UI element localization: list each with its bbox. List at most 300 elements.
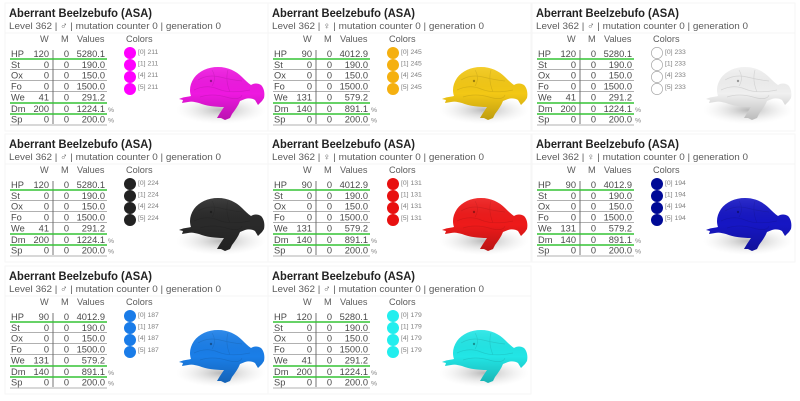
stat table: Fo	[11, 82, 22, 92]
colors legend: [0] 211	[138, 49, 159, 56]
stat table: Fo	[274, 82, 285, 92]
stat table: 0	[64, 246, 69, 256]
stat table: %	[108, 248, 114, 256]
stat table: 5280.1	[77, 180, 105, 190]
stat table: 291.2	[82, 92, 105, 102]
stat table: Ox	[11, 202, 23, 212]
stat table: 0	[591, 104, 596, 114]
stat table: HP	[11, 312, 24, 322]
stat table: Values	[604, 34, 632, 44]
stat table: Sp	[11, 114, 22, 124]
stat table: 200.0	[82, 114, 105, 124]
stat table: 891.1	[345, 104, 368, 114]
panel frame	[5, 266, 268, 394]
heading: Aberrant Beelzebufo (ASA)	[272, 269, 415, 283]
panel frame	[268, 266, 531, 394]
stat table: 140	[296, 235, 312, 245]
stat table: 120	[33, 180, 49, 190]
stat table: 131	[296, 92, 312, 102]
stat table: 4012.9	[340, 180, 368, 190]
stat table: 0	[327, 180, 332, 190]
stat table: 291.2	[345, 356, 368, 366]
stat table: Ox	[538, 202, 550, 212]
stat table: 0	[327, 367, 332, 377]
stat table: HP	[538, 180, 551, 190]
stat table: 0	[64, 60, 69, 70]
stat table	[532, 164, 795, 256]
stat table: Ox	[11, 334, 23, 344]
panel: black male	[5, 134, 268, 262]
stat table: 0	[591, 235, 596, 245]
colors legend: [1] 194	[665, 192, 686, 198]
stat table: 120	[296, 312, 312, 322]
stat table: 0	[64, 224, 69, 234]
stat table: 0	[571, 212, 576, 222]
stat table	[5, 296, 268, 388]
stat table: 200.0	[82, 246, 105, 256]
stat table: %	[635, 107, 641, 114]
stat table: Fo	[538, 212, 549, 222]
stat table: 150.0	[82, 334, 105, 344]
stat table: We	[538, 92, 552, 102]
stat table: 200	[33, 235, 49, 245]
stat table: 150.0	[345, 202, 368, 212]
stat table: W	[303, 297, 312, 307]
stat table: %	[108, 370, 114, 377]
stat table: HP	[11, 49, 24, 59]
stat table: Ox	[538, 70, 550, 80]
panel: blue male	[5, 266, 268, 394]
stat table: 140	[560, 235, 576, 245]
stat table: %	[371, 380, 377, 388]
stat table: 0	[64, 367, 69, 377]
stat table: Dm	[274, 235, 289, 245]
stat table: 0	[591, 224, 596, 234]
colors legend: [4] 211	[138, 72, 159, 79]
stat table: 0	[44, 114, 49, 124]
frog illustration	[176, 198, 266, 255]
frog illustration	[439, 330, 529, 387]
stat table	[5, 33, 268, 125]
stat table: 4012.9	[340, 49, 368, 59]
heading: Aberrant Beelzebufo (ASA)	[9, 269, 152, 283]
stat table: 0	[571, 82, 576, 92]
stat table: Fo	[11, 212, 22, 222]
stat table: 0	[307, 378, 312, 388]
stat table: 150.0	[609, 202, 632, 212]
stat table: W	[567, 165, 576, 175]
stat table: Sp	[538, 246, 549, 256]
stat table: %	[371, 248, 377, 256]
stat table: %	[371, 118, 377, 124]
stat table: 0	[44, 202, 49, 212]
stat table: Values	[340, 297, 368, 307]
stat table: 0	[64, 104, 69, 114]
heading: Aberrant Beelzebufo (ASA)	[536, 6, 679, 20]
stat table: St	[274, 191, 283, 201]
subtitle: Level 362 | ♀ | mutation counter 0 | generation 0	[536, 152, 748, 163]
stat table: 0	[307, 70, 312, 80]
stat table: 190.0	[345, 323, 368, 333]
frog illustration	[176, 330, 266, 387]
stat table: 0	[307, 114, 312, 124]
colors legend: Colors	[653, 165, 680, 175]
stat table: 140	[33, 367, 49, 377]
stat table: 0	[327, 334, 332, 344]
stat table: %	[108, 118, 114, 124]
stat table: 0	[64, 49, 69, 59]
stat table: Dm	[538, 235, 553, 245]
stat table: 0	[327, 60, 332, 70]
stat table: 190.0	[609, 60, 632, 70]
colors legend: [5] 194	[665, 215, 686, 222]
stat table: Dm	[274, 104, 289, 114]
stat table: 0	[307, 202, 312, 212]
stat table: Fo	[274, 344, 285, 354]
stat table: 0	[327, 70, 332, 80]
stat table: 0	[571, 246, 576, 256]
stat table: M	[324, 34, 332, 44]
stat table: W	[40, 297, 49, 307]
heading: Aberrant Beelzebufo (ASA)	[272, 6, 415, 20]
stat table: 0	[591, 191, 596, 201]
colors legend: [1] 187	[138, 324, 159, 330]
colors legend: [5] 224	[138, 215, 159, 222]
stat table: 190.0	[609, 191, 632, 201]
stat table: 291.2	[609, 92, 632, 102]
colors legend: Colors	[389, 297, 416, 307]
subtitle: Level 362 | ♂ | mutation counter 0 | generation 0	[9, 284, 221, 295]
stat table: 150.0	[345, 70, 368, 80]
stat table: 0	[327, 191, 332, 201]
frog illustration	[703, 67, 793, 124]
stat table: 0	[64, 356, 69, 366]
panel frame	[268, 134, 531, 262]
stat table: 1500.0	[340, 344, 368, 354]
stat table: 0	[327, 323, 332, 333]
stat table	[532, 33, 795, 125]
colors legend: [5] 131	[401, 215, 422, 222]
stat table: 0	[591, 246, 596, 256]
stat table: %	[635, 248, 641, 256]
stat table: 1224.1	[604, 104, 632, 114]
stat table: 0	[591, 92, 596, 102]
stat table: M	[588, 165, 596, 175]
stat table: 190.0	[345, 191, 368, 201]
stat table: 0	[327, 202, 332, 212]
stat table: %	[108, 238, 114, 245]
stat table: Dm	[11, 104, 26, 114]
colors legend: [4] 179	[401, 335, 422, 342]
stat table: St	[538, 60, 547, 70]
stat table: %	[108, 107, 114, 114]
stat table: %	[371, 238, 377, 245]
stat table: %	[371, 107, 377, 114]
colors legend: [0] 131	[401, 180, 422, 187]
stat table: 1500.0	[77, 344, 105, 354]
stat table: W	[40, 165, 49, 175]
stat table: 200	[33, 104, 49, 114]
stat table: M	[61, 165, 69, 175]
stat table: 200	[560, 104, 576, 114]
stat table: 0	[64, 92, 69, 102]
stat table: Values	[340, 165, 368, 175]
stat table: 0	[307, 323, 312, 333]
stat table: We	[274, 356, 288, 366]
stat table: 0	[327, 224, 332, 234]
stat table: 0	[327, 356, 332, 366]
stat table: 150.0	[345, 334, 368, 344]
stat table: HP	[274, 49, 287, 59]
stat table: 0	[44, 246, 49, 256]
stat table: Ox	[274, 70, 286, 80]
stat table: Dm	[274, 367, 289, 377]
colors legend	[124, 297, 159, 358]
stat table: 140	[296, 104, 312, 114]
stat table: 0	[44, 378, 49, 388]
stat table: 200.0	[609, 246, 632, 256]
colors legend: Colors	[389, 34, 416, 44]
colors legend: [5] 211	[138, 84, 159, 91]
stat table: 0	[327, 235, 332, 245]
stat table: 0	[571, 114, 576, 124]
stat table: 5280.1	[77, 49, 105, 59]
stat table: Ox	[274, 202, 286, 212]
stat table: We	[11, 92, 25, 102]
stat table: 579.2	[345, 224, 368, 234]
stat table: 891.1	[82, 367, 105, 377]
stat table: We	[538, 224, 552, 234]
heading: Aberrant Beelzebufo (ASA)	[536, 137, 679, 151]
stat table: 200.0	[345, 246, 368, 256]
stat table: 0	[327, 49, 332, 59]
stat table: 0	[64, 70, 69, 80]
stat table: 891.1	[345, 235, 368, 245]
stat table: HP	[274, 180, 287, 190]
stat table: 579.2	[345, 92, 368, 102]
stat table: 0	[44, 82, 49, 92]
stat table: 150.0	[609, 70, 632, 80]
stat table: 0	[64, 191, 69, 201]
stat table: 150.0	[82, 70, 105, 80]
stat table: 41	[39, 224, 49, 234]
subtitle: Level 362 | ♂ | mutation counter 0 | generation 0	[272, 284, 484, 295]
stat table: Sp	[11, 246, 22, 256]
panel frame	[5, 3, 268, 131]
stat table: 0	[44, 70, 49, 80]
stat table: 0	[327, 378, 332, 388]
colors legend	[651, 165, 686, 226]
stat table: Ox	[11, 70, 23, 80]
panel frame	[532, 3, 795, 131]
colors legend: [0] 233	[665, 49, 686, 56]
stat table: 131	[33, 356, 49, 366]
stat table: W	[303, 34, 312, 44]
colors legend: Colors	[126, 297, 153, 307]
stat table: 0	[64, 312, 69, 322]
stat table: Values	[77, 34, 105, 44]
panel: magenta male	[5, 3, 268, 131]
stat table: 1224.1	[77, 235, 105, 245]
stat table: 0	[307, 212, 312, 222]
stat table: W	[567, 34, 576, 44]
stat table: 0	[571, 70, 576, 80]
stat table: Fo	[11, 344, 22, 354]
panel: dark blue female	[532, 134, 795, 262]
colors legend: [5] 233	[665, 84, 686, 91]
stat table: We	[11, 224, 25, 234]
stat table: 0	[44, 60, 49, 70]
colors legend: [1] 131	[401, 192, 422, 198]
stat table: 0	[64, 378, 69, 388]
frog illustration	[176, 67, 266, 124]
heading: Aberrant Beelzebufo (ASA)	[9, 6, 152, 20]
stat table: M	[588, 34, 596, 44]
stat table: Sp	[274, 114, 285, 124]
stat table: 0	[44, 212, 49, 222]
stat table: W	[40, 34, 49, 44]
colors legend	[124, 34, 159, 95]
panel frame	[268, 3, 531, 131]
heading: Aberrant Beelzebufo (ASA)	[272, 137, 415, 151]
stat table	[268, 33, 531, 125]
stat table: 0	[591, 180, 596, 190]
stat table: 0	[64, 82, 69, 92]
subtitle: Level 362 | ♀ | mutation counter 0 | generation 0	[272, 21, 484, 32]
stat table: 4012.9	[77, 312, 105, 322]
stat table: 0	[591, 60, 596, 70]
stat table: M	[324, 165, 332, 175]
stat table: 1500.0	[340, 212, 368, 222]
stat table: 891.1	[609, 235, 632, 245]
colors legend: [4] 131	[401, 203, 422, 210]
stat table: 200.0	[609, 114, 632, 124]
stat table: St	[274, 323, 283, 333]
stat table: 0	[44, 344, 49, 354]
stat table: Sp	[274, 246, 285, 256]
stat table: 41	[566, 92, 576, 102]
colors legend: [1] 211	[138, 60, 159, 68]
colors legend: [4] 233	[665, 72, 686, 79]
stat table: 0	[307, 82, 312, 92]
stat table: We	[274, 92, 288, 102]
stat table: 0	[591, 202, 596, 212]
stat table: 0	[591, 70, 596, 80]
stat table	[268, 164, 531, 256]
colors legend: [4] 224	[138, 203, 159, 210]
colors legend: [0] 179	[401, 312, 422, 319]
subtitle: Level 362 | ♀ | mutation counter 0 | generation 0	[272, 152, 484, 163]
stat table: 1224.1	[340, 367, 368, 377]
stat table: Values	[340, 34, 368, 44]
stat table: HP	[274, 312, 287, 322]
stat table: 0	[591, 49, 596, 59]
stat table: St	[538, 191, 547, 201]
stat table: 0	[64, 235, 69, 245]
stat table: 0	[327, 82, 332, 92]
stat table: %	[108, 380, 114, 388]
frog illustration	[703, 198, 793, 255]
colors legend: [0] 224	[138, 180, 159, 187]
stat table: 0	[307, 344, 312, 354]
stat table: St	[274, 60, 283, 70]
colors legend	[387, 297, 422, 358]
stat table: 0	[64, 212, 69, 222]
stat table: 0	[64, 334, 69, 344]
stat table: 5280.1	[340, 312, 368, 322]
stat table: 0	[44, 334, 49, 344]
stat table: M	[324, 297, 332, 307]
stat table: 579.2	[82, 356, 105, 366]
stat table: 291.2	[82, 224, 105, 234]
stat table: 0	[327, 344, 332, 354]
colors legend: [5] 179	[401, 347, 422, 354]
stat table: 150.0	[82, 202, 105, 212]
stat table: We	[11, 356, 25, 366]
stat table: 120	[560, 49, 576, 59]
stat table: 90	[566, 180, 576, 190]
frog illustration	[439, 67, 529, 124]
stat table: 0	[327, 312, 332, 322]
stat table: Sp	[538, 114, 549, 124]
stat table: 41	[39, 92, 49, 102]
stat table: HP	[538, 49, 551, 59]
stat table: 0	[64, 344, 69, 354]
stat table: Sp	[274, 378, 285, 388]
colors legend: [5] 187	[138, 347, 159, 354]
stat table: 0	[64, 202, 69, 212]
panel: yellow female	[268, 3, 531, 131]
stat table: 1500.0	[604, 212, 632, 222]
stat table: %	[635, 118, 641, 124]
stat table: 0	[591, 114, 596, 124]
stat table: 200.0	[345, 114, 368, 124]
stat table: %	[635, 238, 641, 245]
stat table: 4012.9	[604, 180, 632, 190]
stat table: 0	[591, 82, 596, 92]
stat table: 0	[44, 323, 49, 333]
stat table: 190.0	[82, 60, 105, 70]
stat table: HP	[11, 180, 24, 190]
stat table: Dm	[11, 367, 26, 377]
stat table: Dm	[538, 104, 553, 114]
stat table: 41	[302, 356, 312, 366]
stat table: 1500.0	[77, 82, 105, 92]
stat table: 0	[327, 246, 332, 256]
stat table: Fo	[274, 212, 285, 222]
stat table: 131	[296, 224, 312, 234]
colors legend: [4] 187	[138, 335, 159, 342]
panel: red female	[268, 134, 531, 262]
heading: Aberrant Beelzebufo (ASA)	[9, 137, 152, 151]
colors legend: Colors	[653, 34, 680, 44]
stat table: St	[11, 323, 20, 333]
stat table	[5, 164, 268, 256]
stat table: 5280.1	[604, 49, 632, 59]
stat table: 200.0	[345, 378, 368, 388]
stat table: 0	[64, 114, 69, 124]
subtitle: Level 362 | ♂ | mutation counter 0 | generation 0	[9, 21, 221, 32]
stat table: Ox	[274, 334, 286, 344]
stat table: 0	[307, 334, 312, 344]
colors legend: [1] 224	[138, 192, 159, 198]
stat table: M	[61, 34, 69, 44]
stat table: W	[303, 165, 312, 175]
colors legend: [0] 245	[401, 49, 422, 56]
stat table: 190.0	[82, 191, 105, 201]
stat table: Fo	[538, 82, 549, 92]
colors legend: [5] 245	[401, 84, 422, 91]
